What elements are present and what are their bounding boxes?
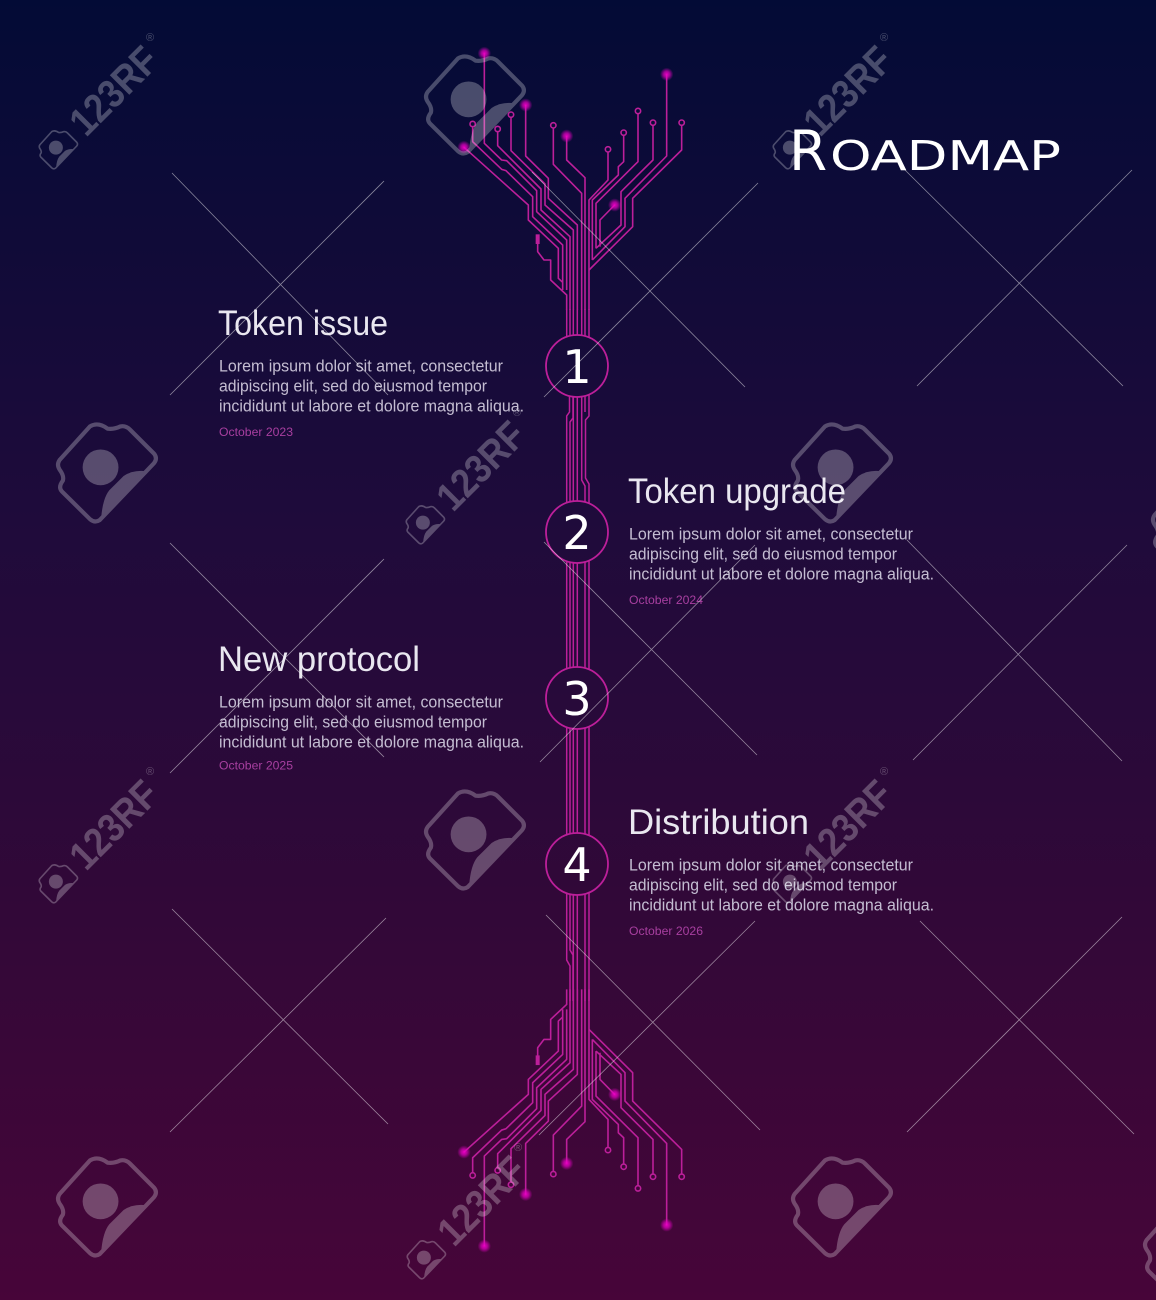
watermark: 123RF lower right	[773, 766, 901, 903]
title: OADMAP	[830, 132, 1061, 180]
watermark: egg icon right edge	[1153, 479, 1156, 577]
node 3: 3	[562, 672, 592, 726]
watermark: 123RF middle	[406, 407, 534, 544]
node 1: 1	[562, 340, 592, 394]
node 4: 4	[562, 838, 592, 892]
watermark: 123RF top left	[39, 32, 167, 169]
watermark: 123RF lower left	[39, 766, 167, 903]
watermark: egg icon top centre	[426, 56, 524, 154]
node 1	[546, 335, 608, 397]
milestone 1: token issue	[218, 304, 524, 439]
milestone 1: token issue: October 2023	[219, 425, 293, 439]
milestone 2: token upgrade	[628, 472, 934, 607]
milestone 1: token issue: Lorem ipsum dolor sit amet, consectetur	[219, 358, 503, 376]
milestone 3: new protocol	[218, 640, 524, 772]
node 2: 2	[562, 506, 592, 560]
node 4	[546, 833, 608, 895]
milestone 4: distribution: incididunt ut labore et dolore magna aliqua.	[629, 896, 934, 914]
milestone 1: token issue: adipiscing elit, sed do eiusmod tempor	[219, 378, 487, 396]
milestone 3: new protocol: October 2025	[219, 758, 293, 772]
milestone 2: token upgrade: Lorem ipsum dolor sit amet, consectetur	[629, 526, 913, 544]
milestone 4: distribution: October 2026	[629, 924, 703, 938]
milestone 4: distribution: adipiscing elit, sed do eiusmod tempor	[629, 876, 897, 894]
watermark: egg icon bottom right edge	[1145, 1204, 1156, 1300]
milestone 3: new protocol: adipiscing elit, sed do eiusmod tempor	[219, 714, 487, 732]
milestone 2: token upgrade: adipiscing elit, sed do eiusmod tempor	[629, 546, 897, 564]
milestone 1: token issue: incididunt ut labore et dolore magna aliqua.	[219, 398, 524, 416]
title: R	[789, 119, 827, 183]
watermark: 123RF bottom	[407, 1142, 535, 1279]
milestone 3: new protocol: incididunt ut labore et dolore magna aliqua.	[219, 734, 524, 752]
watermark: egg icon bottom left	[58, 1158, 156, 1256]
milestone 1: token issue: Token issue	[218, 304, 388, 343]
milestone 3: new protocol: Lorem ipsum dolor sit amet, consectetur	[219, 694, 503, 712]
milestone 4: distribution: Distribution	[628, 803, 809, 842]
watermark: egg icon bottom right	[793, 1158, 891, 1256]
milestone 3: new protocol: New protocol	[218, 640, 420, 679]
milestone 4: distribution: Lorem ipsum dolor sit amet, consectetur	[629, 856, 913, 874]
watermark: egg icon middle right	[793, 424, 891, 522]
milestone 2: token upgrade: October 2024	[629, 593, 703, 607]
circuit: top branches	[457, 47, 684, 310]
watermark: 123RF top right	[773, 32, 901, 169]
watermark: egg icon middle left	[58, 424, 156, 522]
circuit: central bus	[567, 309, 589, 1001]
milestone 2: token upgrade: Token upgrade	[628, 472, 846, 511]
node 3	[546, 667, 608, 729]
circuit: bottom roots	[457, 989, 684, 1253]
milestone 2: token upgrade: incididunt ut labore et dolore magna aliqua.	[629, 566, 934, 584]
node 2	[546, 501, 608, 563]
watermark: egg icon centre	[426, 791, 524, 889]
milestone 4: distribution	[628, 803, 934, 938]
